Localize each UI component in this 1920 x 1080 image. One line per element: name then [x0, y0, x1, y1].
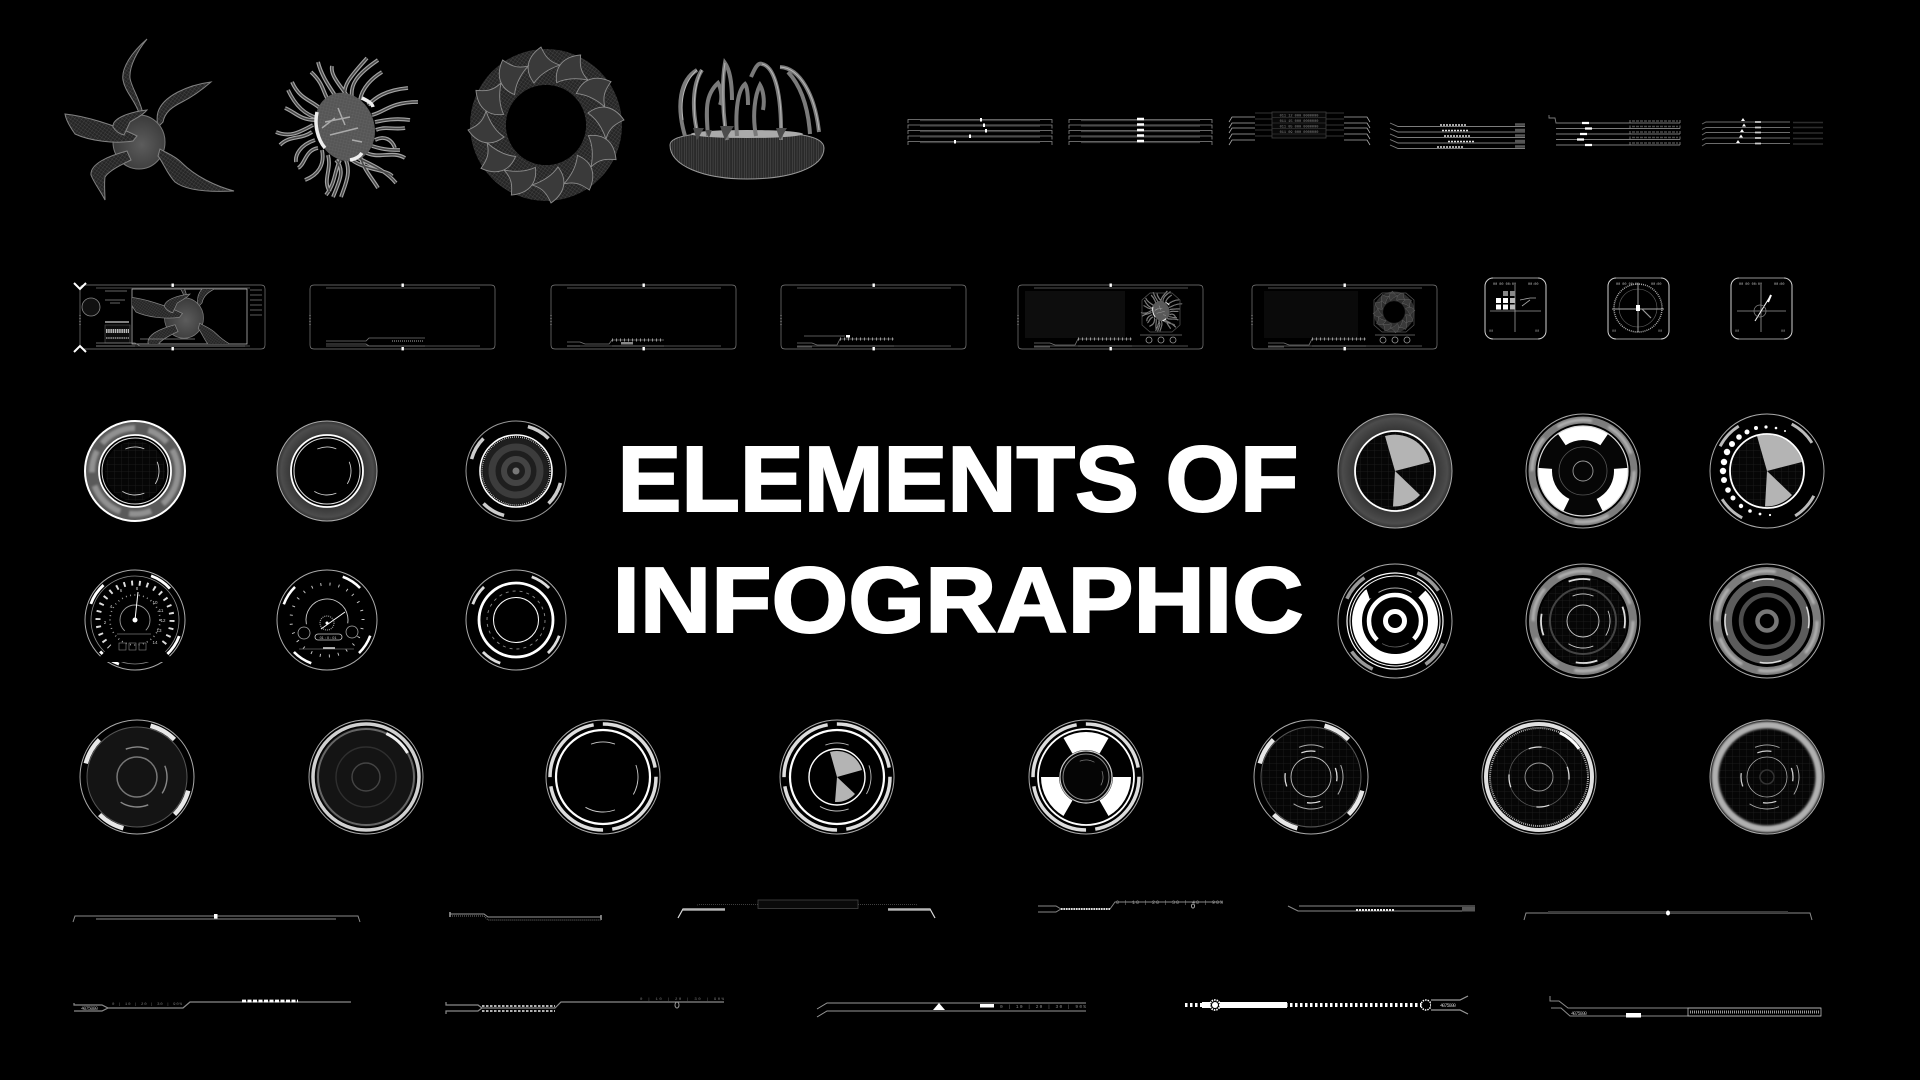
pie gauge: glow ring: [1338, 414, 1452, 528]
gauge: bold white ring: [457, 561, 575, 679]
HUD line group 6: [1702, 118, 1823, 146]
speedometer gauge: 12: [160, 618, 166, 623]
scale bar E: 0 | 10 | 20 | 30 | 90%: [640, 997, 725, 1002]
scale bar G: [1038, 900, 1223, 912]
speedometer gauge: 4: [110, 604, 113, 609]
square widget: tile matrix: [1485, 278, 1546, 339]
scale bar G: 0 | 10 | 20 | 30 | 40 | 90%: [1116, 900, 1223, 906]
speedometer gauge with readout: 01 : 0 : 01: [320, 636, 336, 640]
divider bar A: [73, 914, 360, 922]
chevron icons: [74, 283, 86, 352]
title: ELEMENTS OF: [618, 427, 1298, 531]
speedometer gauge: 2: [104, 620, 107, 625]
bottom dial 4: pie core: [780, 720, 894, 834]
3D object: twisted torus ring: [468, 47, 624, 203]
scale bar D: [74, 1001, 351, 1012]
title: INFOGRAPHIC: [612, 548, 1304, 652]
HUD line group 1: [908, 118, 1052, 145]
progress bar J: [1185, 996, 1469, 1014]
HUD line group 3: 011 15 000 0000000: [1280, 120, 1318, 124]
scale bar D: 4075000: [81, 1006, 98, 1012]
bottom dial 8: [1710, 720, 1824, 834]
HUD line group 5: [1549, 115, 1680, 145]
gauge: concentric target: [460, 415, 572, 527]
scale bar F with triangle: [817, 1003, 1086, 1017]
gauge: soft glow ring: [277, 421, 377, 521]
scale bar H: [1288, 906, 1475, 912]
scale bar K: 4075000: [1571, 1011, 1587, 1017]
divider bar I: [1524, 910, 1812, 920]
HUD frame 1 with creature viewport: [73, 282, 266, 353]
scale bar F with triangle: 0 | 10 | 20 | 30 | 90%: [1000, 1004, 1086, 1010]
HUD line group 3: [1229, 112, 1370, 145]
3D object: spiky tentacled cell: [276, 58, 418, 197]
gauge: grey banded arcs: [1526, 564, 1640, 678]
speedometer gauge with readout: [268, 561, 386, 679]
title: [612, 427, 1304, 652]
progress bar J: 4075000: [1440, 1003, 1456, 1009]
gauge: bold broken rings: [1325, 551, 1465, 691]
bottom dial 3: [546, 720, 660, 834]
bottom dial 1: [72, 712, 202, 842]
speedometer gauge: [75, 560, 195, 680]
HUD frame 6 with ring thumbnail: [1252, 284, 1437, 350]
speedometer gauge: 10: [152, 600, 158, 605]
bottom dial 2: [302, 713, 430, 841]
HUD frame 5 with cell thumbnail: [1018, 284, 1203, 350]
scale bar D: 0 | 10 | 20 | 30 | 90%: [112, 1002, 183, 1007]
HUD line group 4: [1390, 123, 1525, 148]
HUD frame 2: [310, 284, 495, 350]
speedometer gauge: 6: [120, 588, 123, 593]
divider bar C: central box: [678, 900, 935, 918]
speedometer gauge: 13: [156, 628, 162, 633]
speedometer gauge: 8: [136, 586, 139, 591]
3D object: crown jellyfish: [670, 63, 824, 179]
scale bar K: [1550, 996, 1821, 1018]
pie gauge: dotted arc: [1695, 399, 1839, 543]
square widget: radar: [1608, 278, 1669, 339]
gauge: grey concentric: [1710, 564, 1824, 678]
gauge: three white sectors: [1526, 414, 1640, 528]
speedometer gauge: 11: [159, 608, 164, 613]
HUD frame 4: [781, 284, 966, 350]
3D object: five-finned creature: [65, 39, 234, 200]
HUD line group 3: 011 05 000 0000000: [1280, 126, 1318, 130]
HUD frame 3: [551, 284, 736, 350]
HUD line group 3: 011 12 000 0000000: [1280, 114, 1318, 118]
HUD line group 2: [1069, 119, 1212, 145]
bottom dial 6: [1246, 712, 1376, 842]
bottom dial 7: [1474, 712, 1604, 842]
divider bar B: [450, 912, 601, 920]
bottom dial 5: sector ring: [1029, 720, 1143, 834]
gauge: bright banded ring: [85, 421, 185, 521]
speedometer gauge: 14: [152, 640, 158, 645]
square widget: vector plot: [1731, 278, 1792, 339]
HUD line group 3: 011 09 000 0000000: [1280, 131, 1318, 135]
scale bar E: [446, 997, 725, 1014]
